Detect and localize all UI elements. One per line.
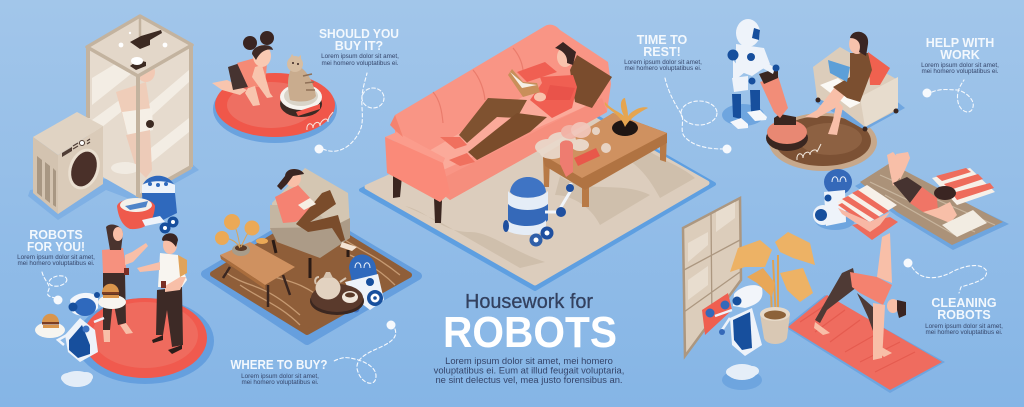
heading: time to rest: mei homero voluptatibus ei. (624, 65, 702, 72)
title: housework for: Housework for (465, 291, 593, 313)
person behind glass (111, 62, 155, 178)
dust cloud (535, 122, 611, 159)
panel: shower and washing machine (28, 16, 199, 220)
striped pillows (837, 185, 898, 240)
girl crawling (212, 31, 274, 106)
heading: cleaning robots: CLEANING (931, 296, 997, 310)
tray with teapot (310, 272, 364, 315)
panel: man on sofa with vacuum robot (361, 25, 714, 289)
woman lying (887, 152, 987, 237)
heading: help with work: Lorem ipsum dolor sit amet, (921, 62, 999, 69)
yoga mat (785, 295, 945, 393)
heading: cleaning robots: mei homero voluptatibus ei. (925, 329, 1003, 336)
connector: where to buy (334, 320, 396, 383)
heading: should you buy it: SHOULD YOU (319, 27, 399, 41)
woman reading (805, 32, 872, 135)
heading: help with work (921, 36, 999, 75)
coffee table (543, 98, 667, 207)
connector: should you buy it (314, 73, 384, 154)
heading: time to rest: TIME TO (637, 33, 688, 47)
heading: robots for you: Lorem ipsum dolor sit amet, (17, 254, 95, 261)
heading: help with work: WORK (940, 48, 980, 62)
round red rug (213, 73, 337, 143)
title block (434, 291, 624, 385)
body text: voluptatibus ei. Eum at illud feugait voluptaria, (434, 364, 624, 376)
man (137, 233, 187, 354)
sofa (385, 25, 611, 223)
round red rug (76, 298, 214, 384)
heading: cleaning robots (925, 296, 1003, 336)
small robot with pillows (813, 169, 855, 230)
panel: girl with cat on robot vacuum (212, 31, 337, 143)
plant (605, 98, 648, 136)
heading: cleaning robots: Lorem ipsum dolor sit amet, (925, 323, 1003, 330)
heading: should you buy it: Lorem ipsum dolor sit amet, (321, 53, 399, 60)
open book (942, 210, 987, 237)
heading: robots for you (17, 228, 95, 267)
brown cushion (570, 55, 612, 108)
wooden floor (205, 212, 418, 341)
heading: time to rest: Lorem ipsum dolor sit amet, (624, 59, 702, 66)
floor polisher (759, 68, 808, 151)
panel: yoga woman, window robot and plant (683, 198, 945, 393)
heading: where to buy: Lorem ipsum dolor sit amet, (241, 373, 319, 380)
heading: should you buy it: mei homero voluptatibus ei. (321, 60, 399, 67)
heading: should you buy it (319, 27, 399, 67)
robot vacuum with cat (280, 54, 322, 117)
laundry robot (117, 176, 178, 234)
heading: where to buy: mei homero voluptatibus ei. (241, 379, 319, 386)
back pillow (932, 168, 995, 205)
heading: robots for you: mei homero voluptatibus ei. (17, 260, 95, 267)
washing machine (33, 112, 105, 214)
heading: robots for you: ROBOTS (29, 228, 83, 242)
red book (574, 148, 600, 166)
connector: help with work (922, 80, 973, 112)
plant in pot (730, 232, 815, 344)
heading: robots for you: FOR YOU! (27, 240, 85, 254)
shower cabin (87, 16, 192, 197)
book (508, 69, 540, 97)
duster (560, 140, 573, 177)
connector: time to rest (665, 78, 732, 154)
heading: should you buy it: BUY IT? (335, 39, 383, 53)
connector: robots for you (42, 272, 68, 304)
window (683, 198, 741, 356)
armchair (813, 47, 905, 132)
robot shadow (722, 104, 764, 126)
heading: cleaning robots: ROBOTS (937, 308, 991, 322)
dust trail (307, 112, 333, 130)
window cleaning robot (702, 285, 762, 390)
dust trail (797, 144, 821, 160)
body text: ne sint delectus vel, mea justo forensibus an. (435, 374, 623, 385)
heading: time to rest (624, 33, 702, 72)
panel: humanoid robot floor polishing and woman reading (722, 19, 905, 171)
blue round robot (345, 254, 384, 312)
burger robot (35, 284, 126, 387)
heading: where to buy: WHERE TO BUY? (230, 358, 328, 372)
yoga woman (814, 233, 906, 360)
mat (855, 163, 1009, 250)
heading: where to buy (230, 358, 328, 386)
woman in armchair (275, 169, 357, 251)
humanoid robot (728, 19, 780, 129)
carpet (361, 96, 714, 289)
body text: Lorem ipsum dolor sit amet, mei homero (445, 355, 613, 366)
panel: woman reading on mat with robot carrying pillows (813, 152, 1009, 250)
shower head (130, 30, 162, 49)
woman (102, 225, 148, 342)
heading: help with work: mei homero voluptatibus ei. (921, 68, 999, 75)
coffee table with flowers (215, 214, 295, 307)
heading: help with work: HELP WITH (926, 36, 994, 50)
body text (434, 355, 624, 385)
heading: time to rest: REST! (643, 45, 681, 59)
man reading (440, 42, 577, 166)
vacuum robot (503, 177, 574, 246)
panel: woman reading in armchair on wooden floor (205, 168, 418, 341)
armchair (270, 168, 350, 278)
panel: couple with burger robot (35, 176, 214, 387)
connector: cleaning robots (904, 258, 987, 293)
title: robots: ROBOTS (443, 308, 617, 357)
round brown rug (769, 113, 877, 171)
